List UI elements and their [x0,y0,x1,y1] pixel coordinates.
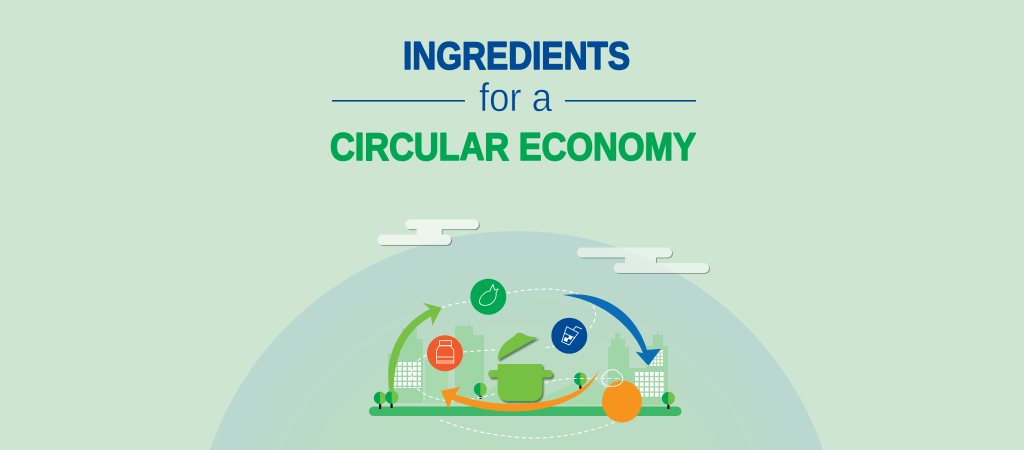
trees [374,373,675,409]
tree 1 [374,392,386,409]
icon: chef hat outline [601,370,623,386]
cloud right [577,248,709,273]
dashed orbit paths [412,289,620,438]
globe dome [210,231,823,450]
icon: drink [551,318,587,354]
orange arrow [441,370,599,412]
icon: chicken [470,279,506,315]
icon: jar [427,335,463,371]
windows left [393,362,421,388]
cloud left [377,220,479,245]
tree 3 [474,383,487,399]
tree 2 [385,391,398,408]
city skyline right [608,332,668,405]
ground [369,406,682,416]
orange circle [602,380,642,422]
windows right [635,350,664,398]
tree 5 [662,392,675,409]
heading: for a with rules: for a [479,76,553,120]
pot body [488,364,553,401]
tree 4 [574,373,587,389]
green arrow [388,303,442,392]
title [330,35,696,169]
heading: CIRCULAR ECONOMY: CIRCULAR ECONOMY [330,126,696,169]
heading: INGREDIENTS: INGREDIENTS [403,35,630,78]
blue arrow [563,294,661,366]
hills [470,378,622,405]
pot [488,333,553,401]
city skyline left [388,322,484,403]
pot lid [498,333,538,360]
